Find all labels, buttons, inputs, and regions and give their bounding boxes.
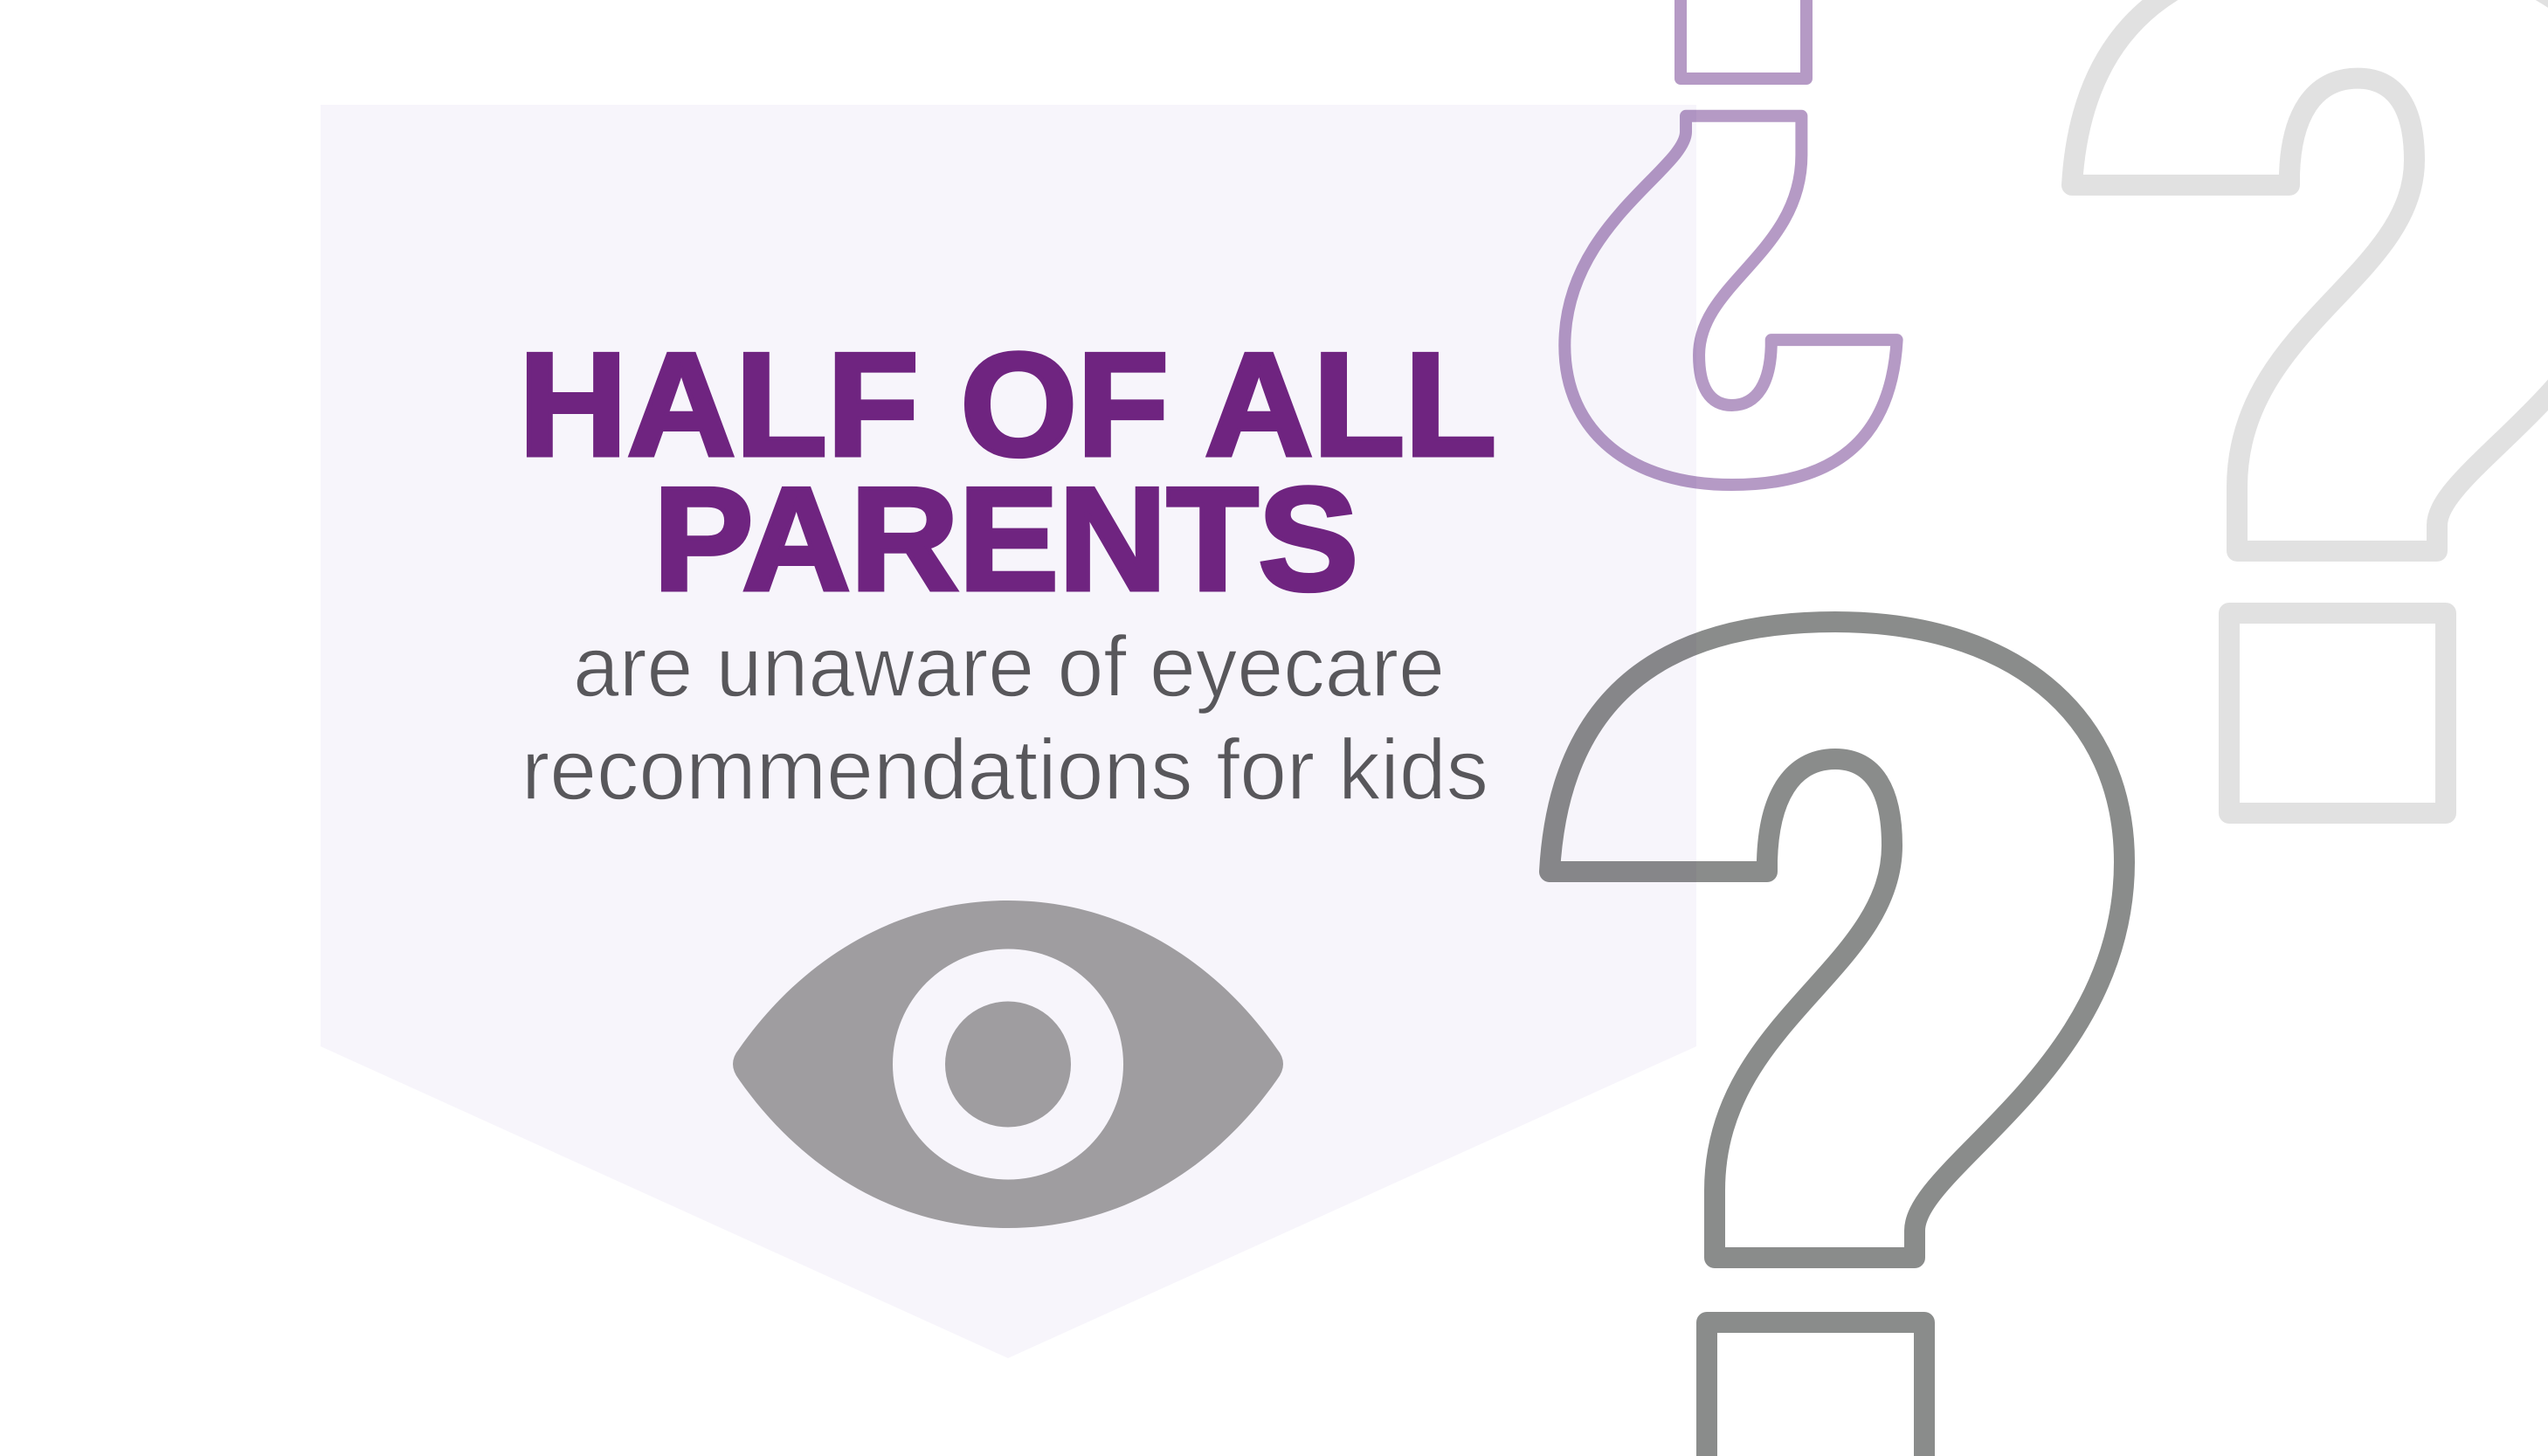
icon: dark grey question mark, bottom [1550, 622, 2124, 1456]
heading: half of all parents: HALF OF ALL [519, 322, 1496, 486]
text block: subheading: are unaware of eyecare [573, 618, 1445, 714]
heading: half of all parents [519, 322, 1496, 621]
icon: light grey question mark, top right [2072, 0, 2548, 813]
panel: pale lilac pennant background [321, 105, 1696, 1358]
icon: upside-down purple question mark, top [1564, 0, 1897, 485]
text block: subheading [521, 618, 1488, 818]
heading: half of all parents: PARENTS [653, 457, 1358, 621]
text block: subheading: recommendations for kids [521, 721, 1488, 818]
icon: eye [733, 901, 1283, 1228]
